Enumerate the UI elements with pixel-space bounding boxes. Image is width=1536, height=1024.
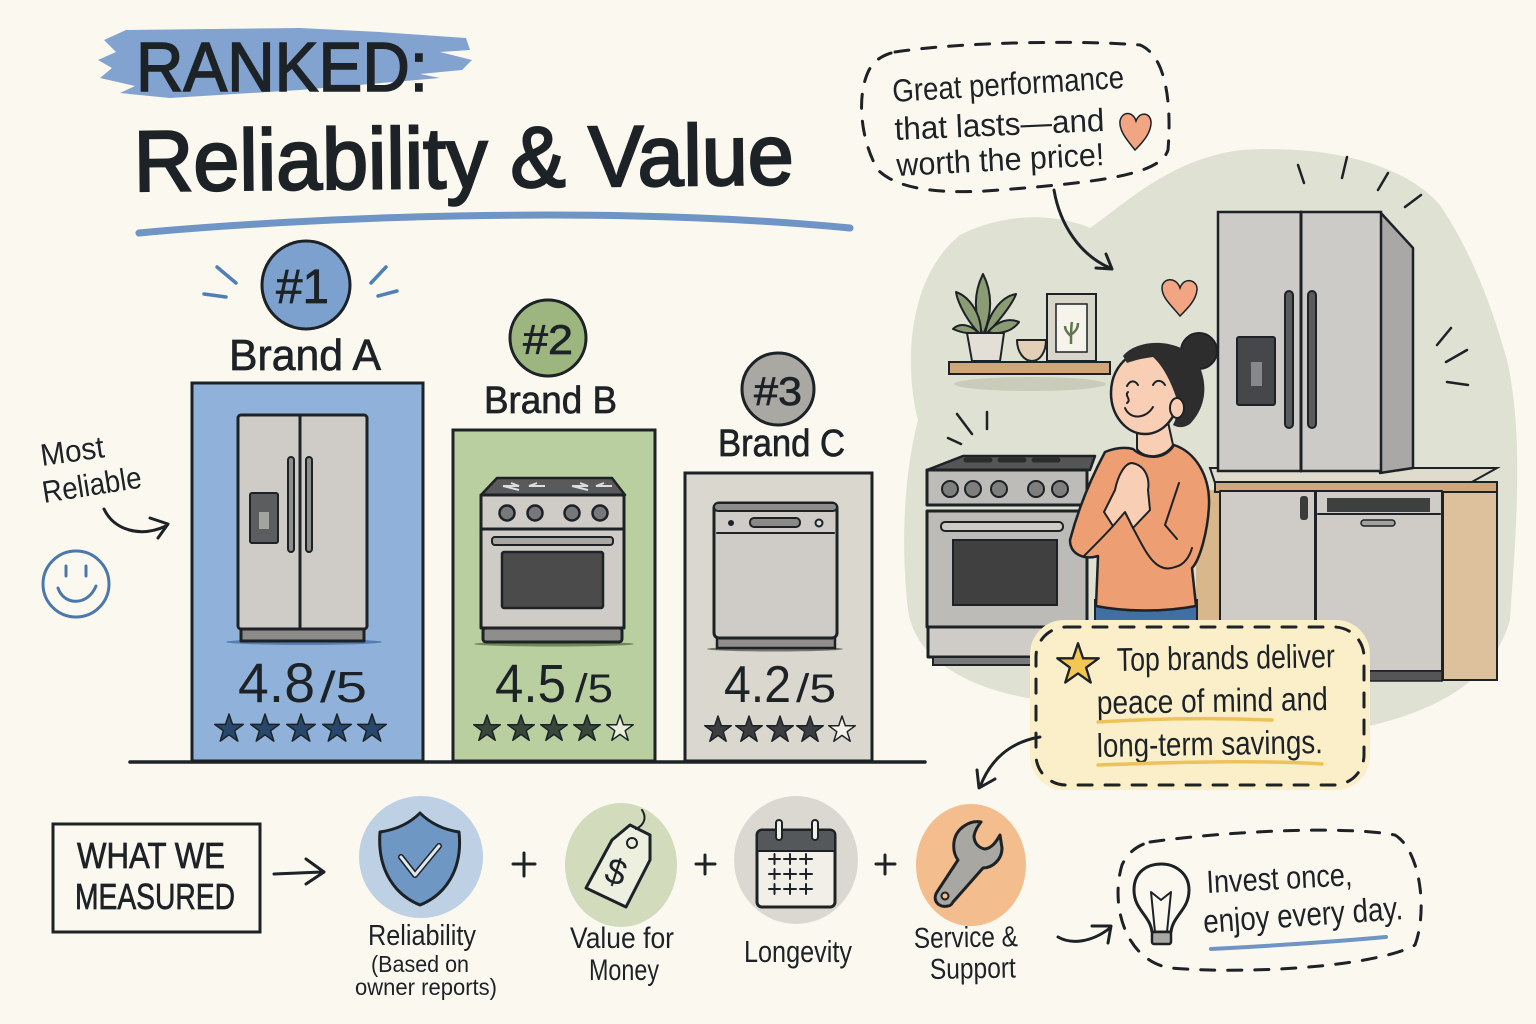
takeaway text: Invest once, (1205, 856, 1353, 900)
rays (204, 267, 397, 297)
hair bun (1181, 333, 1217, 369)
what we measured box: MEASURED (75, 876, 235, 917)
icon: smiley (43, 551, 109, 617)
icon: heart (1162, 280, 1197, 316)
score 4.8/5 (238, 651, 367, 714)
speech bubble (862, 42, 1169, 192)
icon: wrench (916, 804, 1026, 926)
takeaway text (1202, 856, 1404, 940)
panel: brand C (685, 473, 872, 761)
metric: value for money (565, 803, 677, 987)
panel: brand A (192, 383, 423, 761)
metric: reliability (355, 796, 497, 1000)
fridge sparkle rays (1298, 157, 1468, 385)
callout text: peace of mind and (1096, 680, 1328, 721)
score 4.5/5: 4.5 (495, 654, 566, 714)
bubble text: that lasts—and (894, 102, 1105, 147)
bubble text: Great performance (891, 59, 1125, 109)
what we measured box: WHAT WE (77, 835, 225, 876)
label: Value for (570, 922, 674, 955)
label: Service & (914, 921, 1018, 955)
brand B label: Brand B (484, 380, 617, 422)
label (570, 922, 674, 987)
badge #3: #3 (754, 370, 802, 414)
side note: most reliable (38, 429, 168, 538)
icon: price tag: $ (600, 849, 632, 894)
neck (1137, 422, 1173, 456)
icon: small heart (1120, 114, 1151, 150)
callout: top brands (1030, 620, 1370, 790)
arrow from bubble to scene (1054, 190, 1112, 269)
side note: most reliable: Reliable (40, 460, 144, 510)
metric: service and support (914, 804, 1026, 986)
score 4.8/5: 4.8 (238, 651, 315, 714)
score 4.5/5: /5 (575, 667, 613, 711)
star rating four of five (705, 716, 855, 741)
score 4.5/5 (495, 654, 613, 714)
star rating five of five (215, 714, 386, 741)
label: owner reports) (355, 974, 497, 1000)
hair (1123, 343, 1204, 427)
plant (953, 274, 1019, 335)
bubble text (891, 59, 1125, 183)
callout text: Top brands deliver (1116, 637, 1335, 678)
icon: calendar (734, 796, 858, 924)
underline (1211, 937, 1386, 949)
score 4.2/5: 4.2 (724, 656, 791, 714)
fridge icon (226, 415, 382, 645)
brand A label: Brand A (229, 331, 382, 380)
face (1125, 381, 1165, 417)
plus (696, 855, 715, 874)
plus (513, 853, 535, 876)
icon: shield (359, 796, 483, 918)
podium baseline (130, 760, 925, 764)
title underline (139, 215, 850, 233)
panel: brand B (453, 430, 655, 761)
star rating four of five (474, 715, 633, 740)
label (914, 921, 1018, 986)
score 4.8/5: /5 (320, 663, 367, 712)
badge #1: #1 (276, 261, 329, 314)
stove sparkle rays (948, 412, 987, 444)
scene background blob (904, 149, 1517, 728)
cabinet and counter (1196, 468, 1497, 681)
label: (Based on (371, 951, 469, 977)
person (1070, 333, 1217, 630)
takeaway bubble (1118, 830, 1421, 970)
jeans (1095, 600, 1197, 630)
takeaway text: enjoy every day. (1202, 889, 1404, 940)
kitchen scene (904, 149, 1517, 728)
rank 3 header (718, 353, 845, 465)
arrow to metrics (274, 859, 324, 884)
title highlight brush (98, 28, 472, 98)
ear (1170, 398, 1184, 418)
arrow from callout to service (977, 737, 1040, 788)
icon: price tag (565, 803, 677, 927)
title line one: RANKED: (136, 28, 428, 106)
title (98, 28, 850, 233)
what we measured box (53, 824, 260, 932)
icon: light bulb (1134, 864, 1189, 944)
label: Money (589, 954, 659, 987)
oven icon (474, 478, 634, 646)
callout text (1096, 637, 1335, 764)
rank 1 header (204, 241, 397, 380)
metric: longevity (734, 796, 858, 969)
icon: star (1057, 643, 1099, 683)
label (355, 920, 497, 1000)
head (1111, 352, 1179, 434)
dishwasher icon (707, 503, 843, 652)
arrow to takeaway (1058, 926, 1111, 943)
title line two: Reliability & Value (133, 107, 794, 210)
badge #2: #2 (523, 316, 573, 363)
label: Longevity (744, 934, 852, 969)
callout text: long-term savings. (1096, 723, 1323, 764)
bubble outline (862, 42, 1169, 192)
stove (927, 456, 1095, 665)
label: Support (930, 953, 1016, 986)
rank 2 header (484, 300, 617, 422)
plus (876, 855, 895, 874)
large fridge (1218, 212, 1413, 473)
arrow to brand A (104, 509, 168, 538)
badge #1 (262, 241, 350, 329)
score 4.2/5: /5 (796, 667, 836, 711)
brand C label: Brand C (718, 423, 845, 465)
sweater (1070, 445, 1209, 610)
score 4.2/5 (724, 656, 836, 714)
highlight underlines (1098, 719, 1322, 765)
side note: most reliable: Most (38, 429, 107, 473)
hands (1104, 463, 1150, 528)
bubble text: worth the price! (895, 136, 1105, 183)
shelf with plant and frame (949, 274, 1110, 391)
label: Reliability (368, 920, 476, 952)
